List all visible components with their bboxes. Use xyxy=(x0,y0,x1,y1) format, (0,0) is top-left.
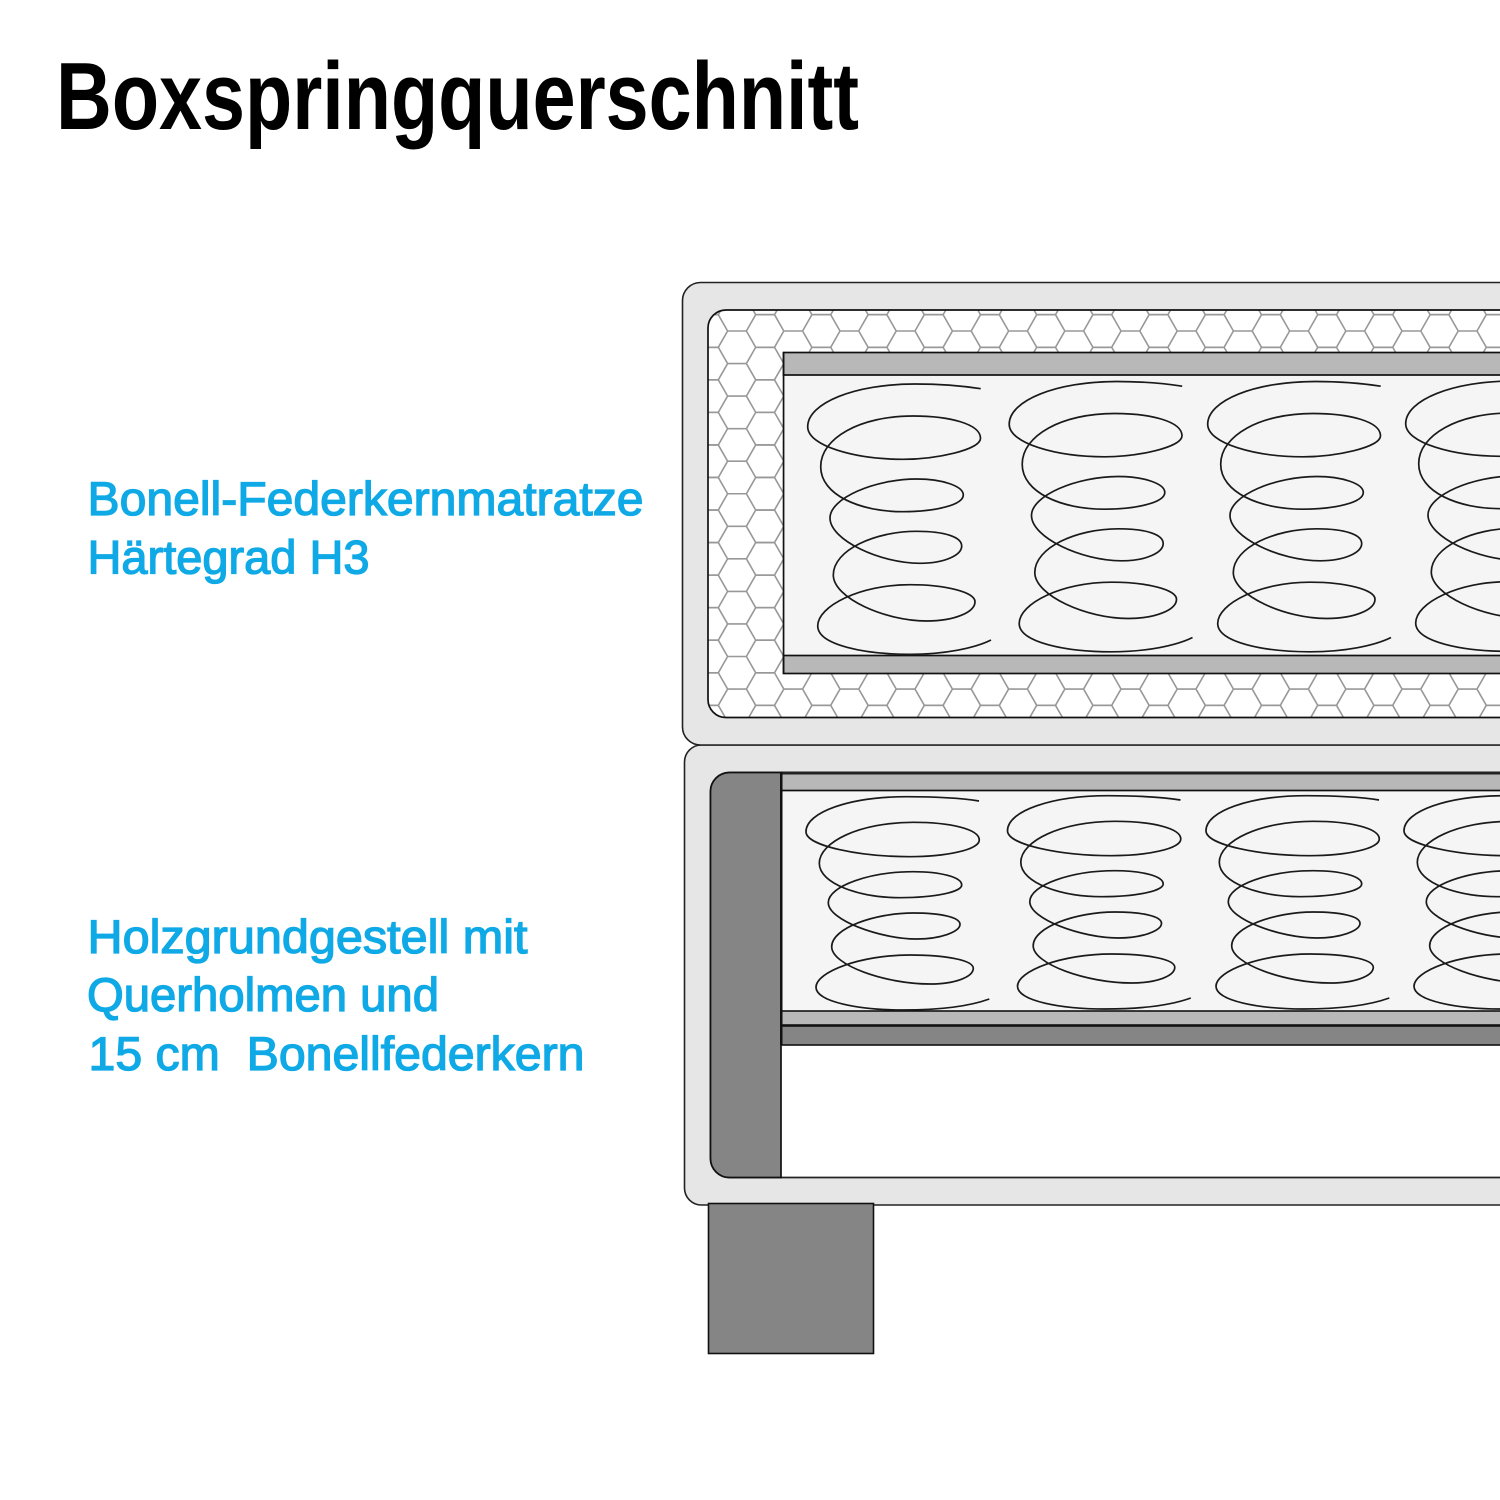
mattress spring 2 xyxy=(1009,382,1192,652)
base top pad xyxy=(782,773,1500,790)
base upholstery shell xyxy=(684,745,1500,1205)
core left edge xyxy=(783,352,784,674)
label: mattress: Härtegrad H3 xyxy=(88,530,370,584)
label: base: Holzgrundgestell mit xyxy=(88,910,528,963)
label: mattress xyxy=(88,472,644,584)
spring core background xyxy=(784,375,1500,656)
foam layer outline xyxy=(708,310,1500,718)
top felt pad xyxy=(784,352,1500,375)
base top edge xyxy=(781,772,1500,774)
foam layer xyxy=(708,310,1500,718)
foam honeycomb pattern xyxy=(708,310,1500,717)
box spring base xyxy=(684,745,1500,1205)
base spring 3 xyxy=(1206,796,1389,1009)
base spring 4 xyxy=(1404,796,1500,1009)
mattress cover xyxy=(682,282,1500,745)
bed leg xyxy=(708,1204,874,1354)
mattress spring 3 xyxy=(1208,382,1391,652)
mattress xyxy=(671,282,1500,745)
label: base: Querholmen und xyxy=(87,968,439,1021)
base spring 2 xyxy=(1008,796,1191,1009)
label: mattress: Bonell-Federkernmatratze xyxy=(88,472,644,525)
label: base xyxy=(87,910,584,1080)
base spring core xyxy=(782,790,1500,1011)
wooden frame post xyxy=(710,772,781,1178)
base bottom pad xyxy=(782,1011,1500,1025)
base post divider xyxy=(780,772,782,1045)
cross beam xyxy=(782,1026,1500,1045)
title: Boxspringquerschnitt xyxy=(56,43,859,150)
base frame interior xyxy=(710,772,1500,1178)
label: base: 15 cm Bonellfederkern xyxy=(88,1027,584,1080)
mattress spring 4 xyxy=(1406,381,1500,651)
bottom felt pad xyxy=(784,656,1500,674)
mattress spring 1 xyxy=(808,384,991,654)
base spring 1 xyxy=(806,797,989,1010)
